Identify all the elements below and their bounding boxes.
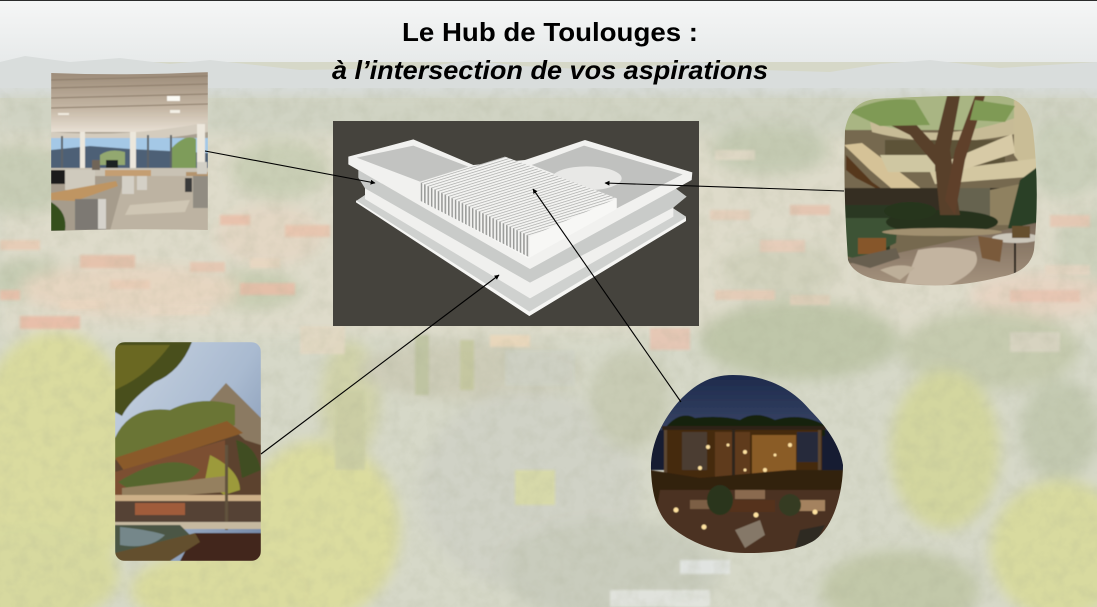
bottom plate xyxy=(356,195,686,316)
title: Le Hub de Toulouges : xyxy=(402,17,698,47)
photo: open-plan office xyxy=(51,72,208,232)
fins: roof face xyxy=(421,157,617,237)
recessed grey soffit xyxy=(358,170,687,283)
arrow: courtyard to model xyxy=(605,183,844,191)
photo: tree courtyard xyxy=(842,94,1040,290)
panel: 3D building model xyxy=(333,121,699,326)
arrow: building to model xyxy=(261,275,499,454)
arrow: terrace to model xyxy=(533,189,681,402)
top slab xyxy=(348,139,692,269)
front wall under fins xyxy=(421,183,617,258)
photo: night rooftop terrace xyxy=(650,374,845,555)
fins: side face xyxy=(421,183,530,258)
photo: green terraced building xyxy=(115,342,261,561)
left roof inset xyxy=(357,146,468,182)
circular patio xyxy=(552,166,622,190)
right roof inset xyxy=(532,146,683,208)
top edge line xyxy=(0,0,1097,1)
title xyxy=(332,17,768,85)
middle white band xyxy=(365,187,673,298)
arrow: office to model xyxy=(205,151,375,183)
title: à l’intersection de vos aspirations xyxy=(332,55,768,85)
